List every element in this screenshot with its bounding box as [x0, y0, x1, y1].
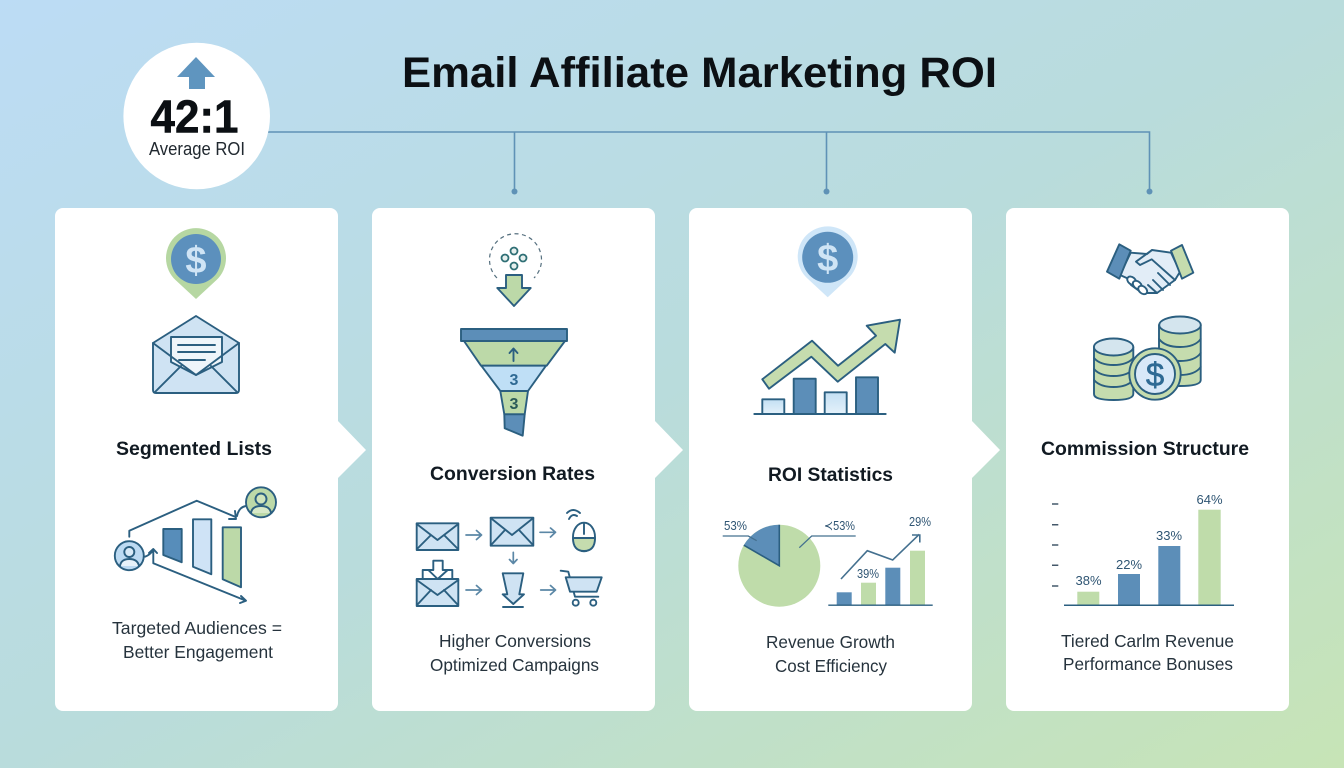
heading: Segmented Lists — [116, 438, 272, 460]
description — [766, 632, 895, 676]
panel: conversion rates — [372, 208, 683, 711]
bar chart: 38% — [1075, 573, 1102, 588]
bar chart — [1052, 492, 1234, 605]
bar chart: 33% — [1156, 528, 1182, 543]
icon: up arrow — [177, 57, 215, 89]
pie chart: ≺53% — [824, 518, 855, 533]
panel: commission structure — [1006, 208, 1289, 711]
description — [112, 618, 282, 662]
icon: dollar pin: $ — [185, 240, 207, 282]
bar and trend chart: 29% — [909, 514, 931, 529]
panel: ROI statistics — [689, 208, 1000, 711]
icon: dollar pin — [798, 226, 858, 297]
icon: conversion funnel: 3 — [510, 372, 519, 389]
bar and trend chart — [828, 514, 933, 605]
icon: dollar pin: $ — [817, 238, 838, 280]
description: Better Engagement — [123, 642, 273, 662]
icon: conversion funnel — [461, 329, 567, 436]
icon: dashed circle and down arrow — [490, 234, 542, 306]
icon: dollar pin — [166, 228, 226, 299]
badge: 42:1 average ROI — [123, 43, 270, 189]
description: Revenue Growth — [766, 632, 895, 652]
icon: audience segmentation chart — [115, 487, 276, 603]
icon: handshake — [1107, 244, 1193, 296]
icon: rising bars and arrow — [754, 320, 900, 414]
heading: Conversion Rates — [430, 463, 595, 485]
icon: email to purchase flow — [417, 510, 602, 607]
bar chart: 64% — [1196, 492, 1223, 507]
description: Optimized Campaigns — [430, 655, 599, 675]
heading: ROI Statistics — [768, 464, 893, 486]
pie chart — [723, 518, 856, 607]
description: Cost Efficiency — [775, 656, 887, 676]
description: Tiered Carlm Revenue — [1061, 631, 1234, 651]
heading: Commission Structure — [1041, 438, 1249, 460]
description: Higher Conversions — [439, 631, 591, 651]
icon: coin stacks: $ — [1146, 356, 1164, 393]
title: Email Affiliate Marketing ROI — [402, 49, 997, 97]
badge label: Average ROI — [149, 139, 245, 159]
icon: coin stacks — [1094, 316, 1201, 400]
icon: conversion funnel: 3 — [510, 396, 519, 413]
connector lines — [268, 132, 1152, 194]
bar and trend chart: 39% — [857, 566, 879, 581]
icon: open envelope — [153, 316, 239, 393]
bar chart: 22% — [1116, 557, 1142, 572]
description: Performance Bonuses — [1063, 654, 1233, 674]
description — [1061, 631, 1234, 674]
description — [430, 631, 599, 675]
pie chart: 53% — [724, 518, 747, 533]
panel: segmented lists — [55, 208, 366, 711]
badge number: 42:1 — [150, 90, 238, 142]
description: Targeted Audiences = — [112, 618, 282, 638]
